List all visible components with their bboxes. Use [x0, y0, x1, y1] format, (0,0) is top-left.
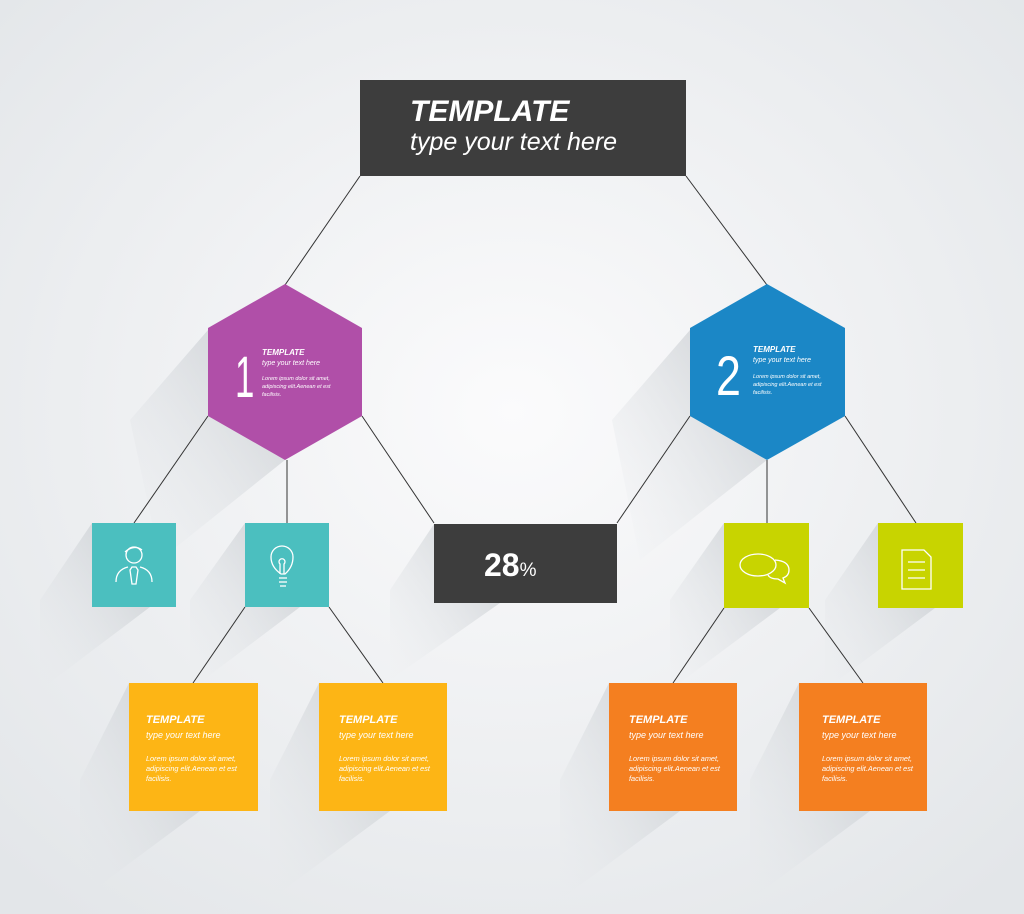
hexagon 2: Lorem ipsum dolor sit amet, [753, 374, 821, 380]
orange box 1 [609, 683, 737, 811]
title box: TEMPLATE [410, 95, 570, 128]
teal box: person icon [92, 523, 176, 607]
yellow box 1: adipiscing elit.Aenean et est [146, 764, 238, 773]
hexagon 1: TEMPLATE [262, 348, 305, 357]
connector lines [134, 176, 916, 683]
28% box [434, 524, 617, 603]
yellow box 1: Lorem ipsum dolor sit amet, [146, 754, 236, 763]
orange box 2: TEMPLATE [822, 714, 881, 726]
hexagon 1: facilisis. [262, 392, 281, 398]
hexagon 1: 1 [235, 346, 254, 410]
lime box: chat icon [724, 523, 809, 608]
yellow box 1: type your text here [146, 730, 221, 740]
hexagon 2: 2 [716, 344, 741, 407]
orange box 2: facilisis. [822, 774, 848, 783]
teal box: bulb icon [245, 523, 329, 607]
yellow box 1: facilisis. [146, 774, 172, 783]
hexagon 2: adipiscing elit.Aenean et est [753, 382, 822, 388]
orange box 2: Lorem ipsum dolor sit amet, [822, 754, 912, 763]
shadows [40, 330, 935, 900]
hexagon 2: facilisis. [753, 390, 772, 396]
hexagon 2: type your text here [753, 357, 811, 364]
yellow box 2: type your text here [339, 730, 414, 740]
hexagon 2 [690, 284, 845, 460]
lime box: document icon [878, 523, 963, 608]
title box [360, 80, 686, 176]
orange box 2 [799, 683, 927, 811]
hexagon 1 [208, 284, 362, 460]
yellow box 2: Lorem ipsum dolor sit amet, [339, 754, 429, 763]
hexagon 1: type your text here [262, 360, 320, 367]
yellow box 2: adipiscing elit.Aenean et est [339, 764, 431, 773]
yellow box 2: facilisis. [339, 774, 365, 783]
28% box: 28% [484, 547, 537, 583]
hexagon 1: Lorem ipsum dolor sit amet, [262, 376, 330, 382]
hexagon 2: TEMPLATE [753, 345, 796, 354]
yellow box 1 [129, 683, 258, 811]
orange box 1: Lorem ipsum dolor sit amet, [629, 754, 719, 763]
orange box 1: type your text here [629, 730, 704, 740]
hexagon 1: adipiscing elit.Aenean et est [262, 384, 331, 390]
yellow box 2 [319, 683, 447, 811]
yellow box 2: TEMPLATE [339, 714, 398, 726]
orange box 2: adipiscing elit.Aenean et est [822, 764, 914, 773]
orange box 1: facilisis. [629, 774, 655, 783]
orange box 1: adipiscing elit.Aenean et est [629, 764, 721, 773]
title box: type your text here [410, 128, 617, 156]
orange box 1: TEMPLATE [629, 714, 688, 726]
orange box 2: type your text here [822, 730, 897, 740]
yellow box 1: TEMPLATE [146, 714, 205, 726]
